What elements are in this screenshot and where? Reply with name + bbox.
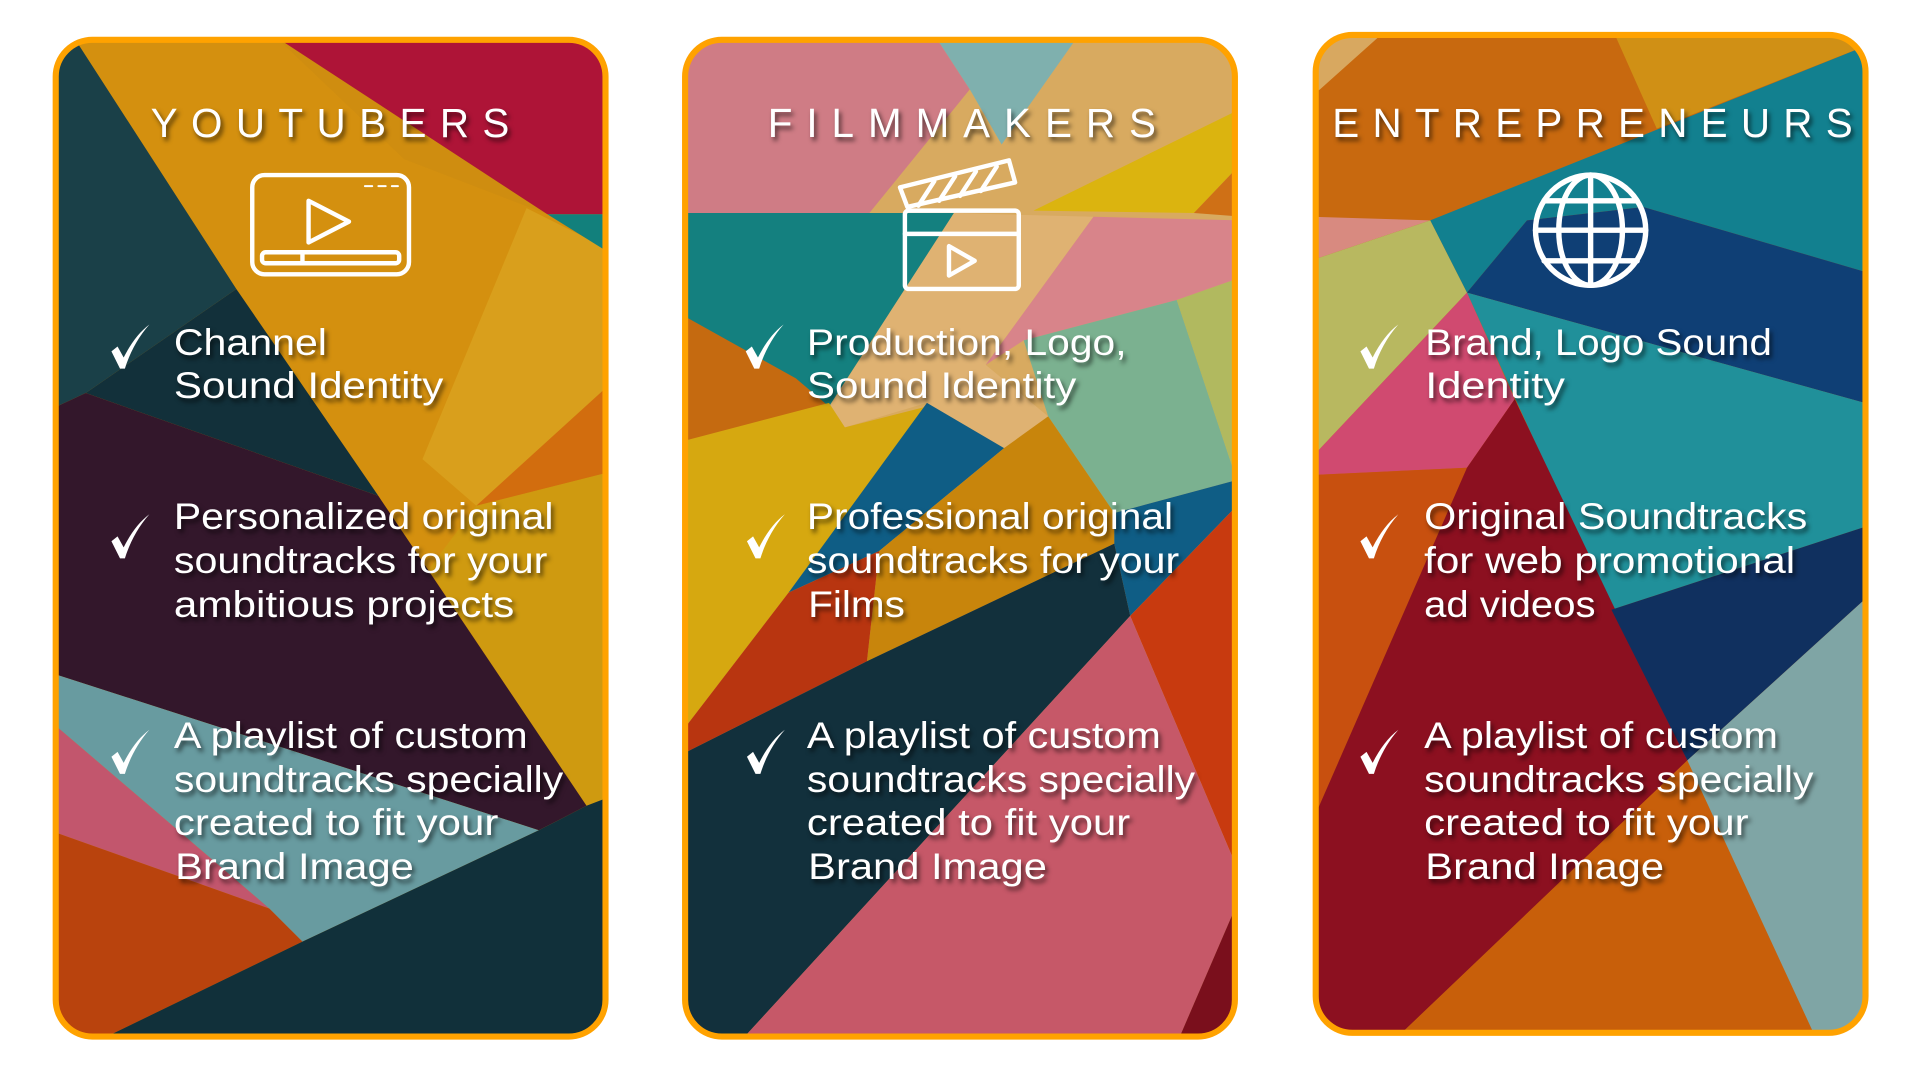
bullet: playlist bbox=[1360, 715, 1814, 887]
bullet: playlist: soundtracks specially bbox=[174, 759, 564, 800]
bullet: playlist: Brand Image bbox=[1425, 846, 1664, 887]
bullet: playlist bbox=[111, 715, 564, 887]
icon: clapperboard bbox=[900, 160, 1019, 289]
bullet: professional soundtracks: soundtracks for your bbox=[807, 540, 1179, 581]
bullet: playlist: Brand Image bbox=[175, 846, 414, 887]
bullet: channel identity bbox=[111, 322, 444, 406]
bullet: playlist: Brand Image bbox=[808, 846, 1047, 887]
bullet: playlist: A playlist of custom bbox=[174, 715, 528, 756]
bullet: original soundtracks: ad videos bbox=[1424, 584, 1596, 625]
bullet: playlist: created to fit your bbox=[807, 802, 1130, 843]
bullet: production identity: Sound Identity bbox=[807, 365, 1077, 406]
bullet: original soundtracks: ambitious projects bbox=[174, 584, 514, 625]
bullet: playlist: soundtracks specially bbox=[1424, 759, 1814, 800]
bullet: original soundtracks bbox=[111, 496, 553, 625]
bullet: professional soundtracks bbox=[747, 496, 1179, 625]
bullet: original soundtracks: Personalized original bbox=[174, 496, 553, 537]
bullet: original soundtracks: soundtracks for your bbox=[174, 540, 547, 581]
bullet: professional soundtracks: Professional original bbox=[807, 496, 1173, 537]
panel: filmmakers bbox=[680, 31, 1243, 1047]
card border bbox=[1316, 35, 1866, 1033]
bullet: original soundtracks: for web promotional bbox=[1424, 540, 1795, 581]
bullet: playlist: soundtracks specially bbox=[807, 759, 1196, 800]
panel: youtubers bbox=[49, 31, 612, 1047]
heading: FILMMAKERS bbox=[768, 100, 1156, 146]
heading: ENTREPRENEURS bbox=[1332, 100, 1853, 146]
card border bbox=[685, 40, 1235, 1037]
heading: YOUTUBERS bbox=[151, 100, 509, 146]
bullet: production identity: Production, Logo, bbox=[807, 322, 1127, 363]
icon: globe bbox=[1536, 175, 1646, 285]
panel: entrepreneurs bbox=[1310, 27, 1873, 1043]
bullet: channel identity: Channel bbox=[174, 322, 327, 363]
background: filmmakers geometric artwork bbox=[680, 31, 1243, 1047]
bullet: original soundtracks bbox=[1360, 496, 1807, 625]
bullet: playlist: A playlist of custom bbox=[1424, 715, 1778, 756]
icon: video player bbox=[252, 175, 409, 274]
bullet: brand identity: Brand, Logo Sound bbox=[1425, 322, 1772, 363]
background: youtubers geometric artwork bbox=[49, 31, 612, 1047]
bullet: playlist bbox=[747, 715, 1196, 887]
bullet: production identity bbox=[746, 322, 1127, 406]
bullet: playlist: A playlist of custom bbox=[807, 715, 1161, 756]
bullet: brand identity bbox=[1360, 322, 1772, 406]
bullet: playlist: created to fit your bbox=[174, 802, 498, 843]
card border bbox=[56, 40, 606, 1037]
bullet: professional soundtracks: Films bbox=[808, 584, 905, 625]
bullet: original soundtracks: Original Soundtracks bbox=[1424, 496, 1807, 537]
bullet: playlist: created to fit your bbox=[1424, 802, 1749, 843]
bullet: brand identity: Identity bbox=[1425, 365, 1566, 406]
background: entrepreneurs geometric artwork bbox=[1310, 27, 1873, 1043]
bullet: channel identity: Sound Identity bbox=[174, 365, 444, 406]
